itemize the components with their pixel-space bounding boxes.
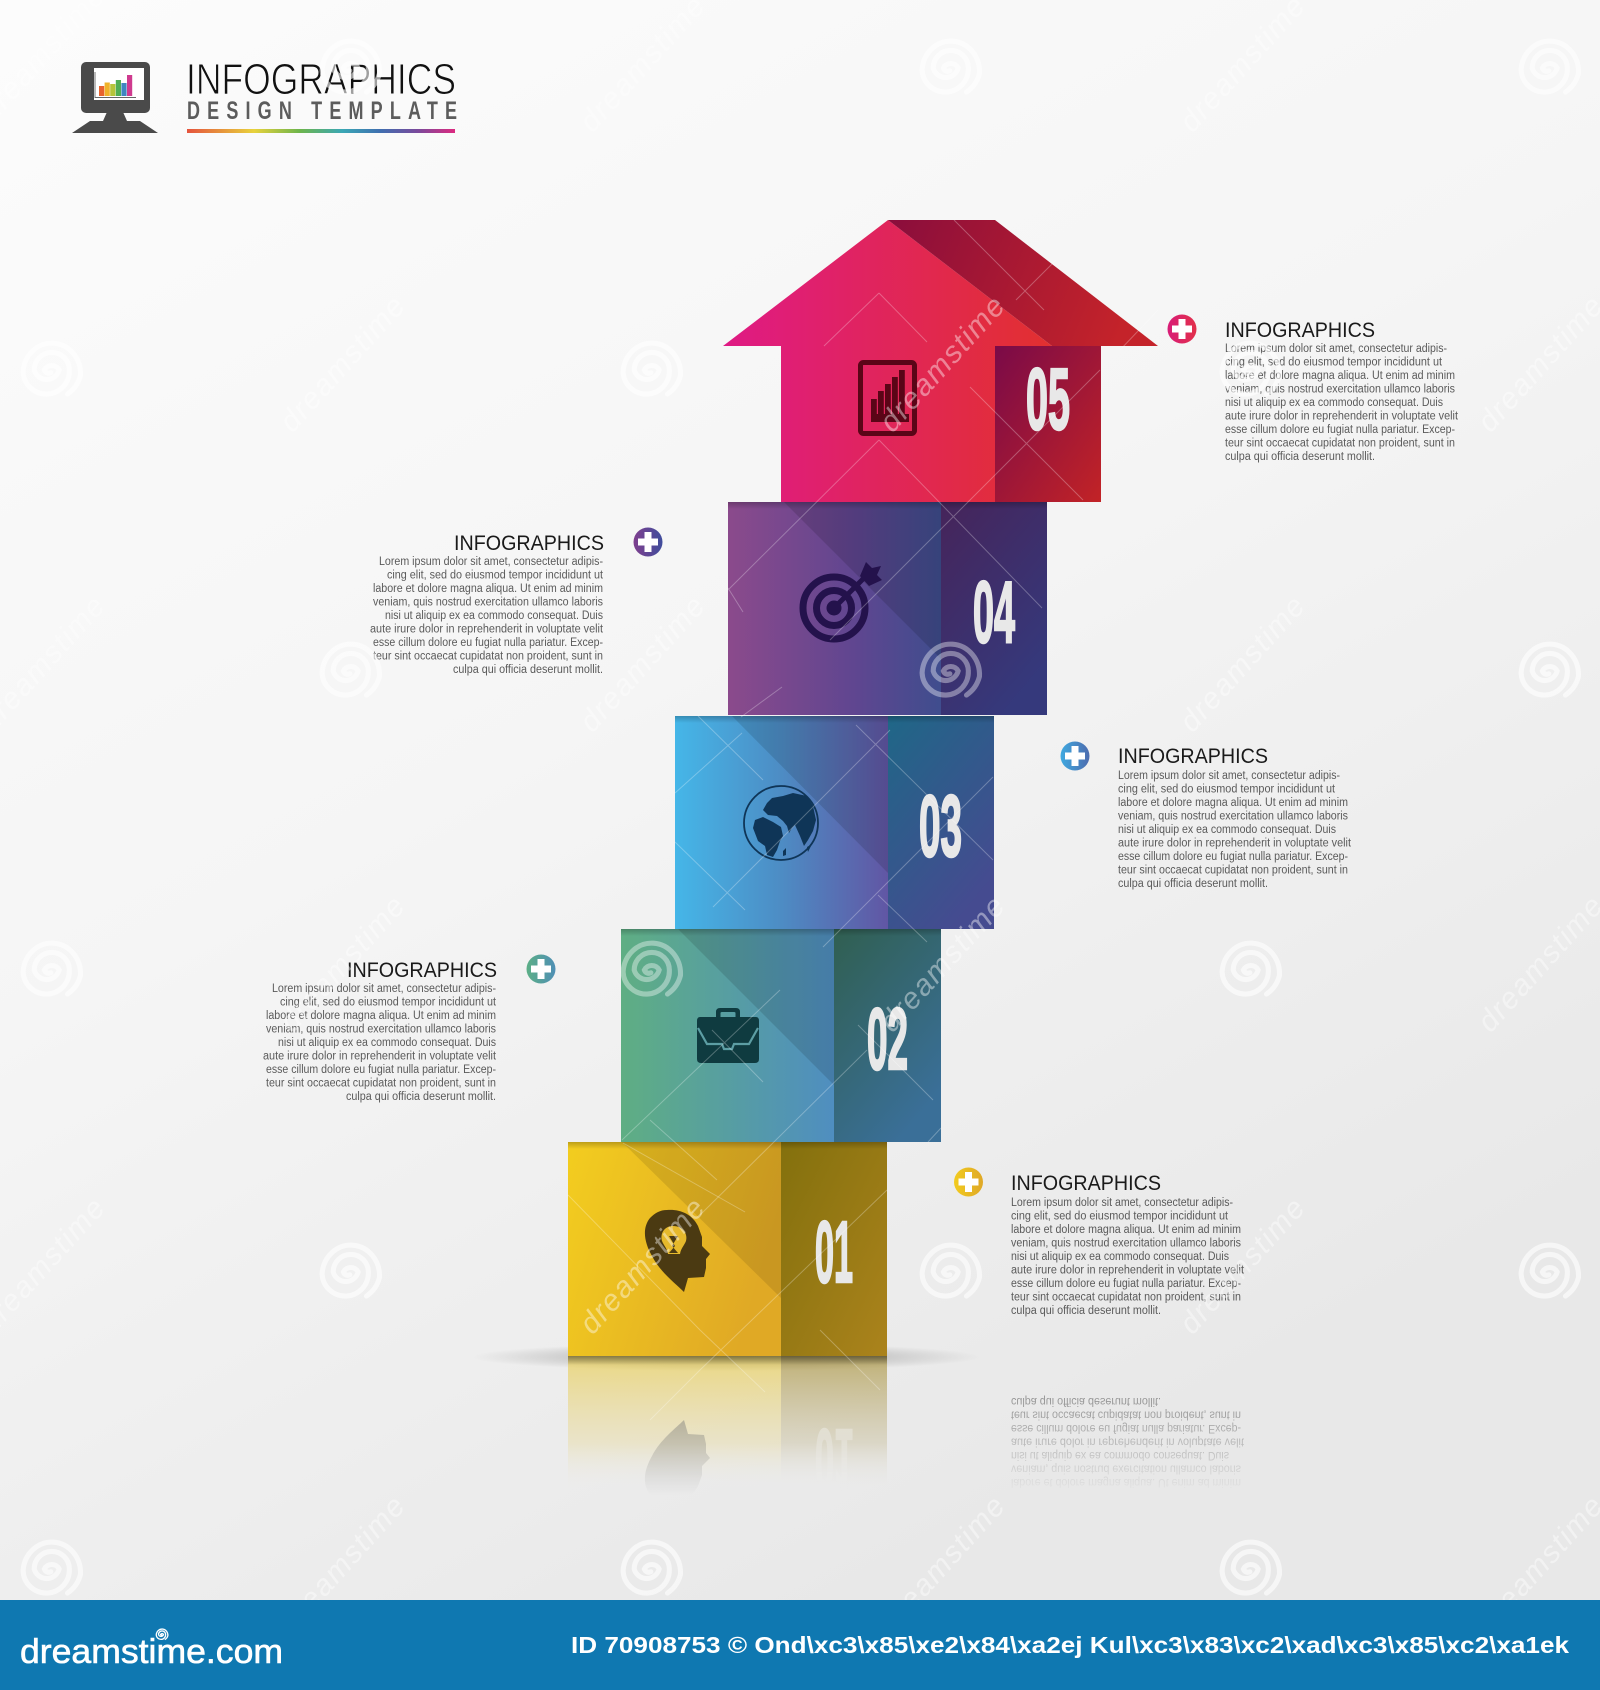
side panel [888,716,994,929]
body 02: labore et dolore magna aliqua. Ut enim ad minim [266,1010,496,1022]
watermark layer: dreamstime [1173,1191,1313,1340]
icon: plus badge 05 [1168,314,1196,344]
diagonal shadow [784,502,941,659]
icon: plus badge 01 [954,1168,983,1196]
watermark layer: dreamstime [573,589,713,738]
step 01: yellow box: 01 [815,1204,853,1301]
body 02: teur sint occaecat cupidatat non proident, sunt in [266,1078,496,1090]
icon: plus badge 02 [526,954,556,984]
header logo [72,55,457,133]
body 05 [1225,343,1459,463]
text block 04 [370,528,662,676]
body 04: Lorem ipsum dolor sit amet, consectetur adipis- [379,556,603,568]
body 01: cing elit, sed do eiusmod tempor incididunt ut [1011,1210,1229,1222]
heading 02: INFOGRAPHICS [347,959,497,982]
reflection of step 01 [498,1348,1244,1486]
reflected text: veniam, quis nostrud exercitation ullamco laboris [1011,1462,1241,1474]
body 01: teur sint occaecat cupidatat non proident, sunt in [1011,1292,1241,1304]
body 03: aute irure dolor in reprehenderit in voluptate velit [1118,838,1352,850]
reflected text: nisi ut aliquip ex ea commodo consequat. Duis [1011,1449,1229,1461]
step 03: blue box: 03 [919,778,962,875]
reflected text: labore et dolore magna aliqua. Ut enim ad minim [1011,1476,1241,1488]
body 01: Lorem ipsum dolor sit amet, consectetur adipis- [1011,1197,1233,1209]
body 05: culpa qui officia deserunt mollit. [1225,451,1375,463]
body 04: nisi ut aliquip ex ea commodo consequat. Duis [385,610,603,622]
watermark layer: dreamstime [873,889,1013,1038]
footer logo: dreamstime.com [20,1633,283,1671]
heading 04: INFOGRAPHICS [454,532,604,555]
body 04 [370,556,604,676]
body 01: veniam, quis nostrud exercitation ullamco laboris [1011,1238,1241,1250]
footer bar [0,1600,1600,1690]
step 05: pink arrow house: 05 [1026,351,1070,448]
body 04: culpa qui officia deserunt mollit. [453,664,603,676]
step 05: pink arrow house [723,220,1158,502]
body 04: cing elit, sed do eiusmod tempor incididunt ut [387,570,604,582]
watermark layer: dreamstime [273,1489,413,1638]
step 04: purple box [728,502,1047,715]
body 02: esse cillum dolore eu fugiat nulla pariatur. Excep- [266,1064,496,1076]
body 05: veniam, quis nostrud exercitation ullamco laboris [1225,384,1455,396]
watermark layer: dreamstime [273,889,413,1038]
body 05: Lorem ipsum dolor sit amet, consectetur adipis- [1225,343,1447,355]
diagonal shadow [732,716,888,873]
body 01: labore et dolore magna aliqua. Ut enim ad minim [1011,1224,1241,1236]
body 03: Lorem ipsum dolor sit amet, consectetur adipis- [1118,770,1340,782]
watermark layer: dreamstime [1173,589,1313,738]
body 02: aute irure dolor in reprehenderit in voluptate velit [263,1050,497,1062]
body 04: veniam, quis nostrud exercitation ullamco laboris [373,596,603,608]
watermark layer: dreamstime [573,1191,713,1340]
body 03: labore et dolore magna aliqua. Ut enim ad minim [1118,797,1348,809]
icon: globe [744,786,818,860]
body 04: aute irure dolor in reprehenderit in voluptate velit [370,624,604,636]
text block 01 [954,1168,1245,1317]
step 02: green box [621,929,941,1142]
body 05: teur sint occaecat cupidatat non proident, sunt in [1225,438,1455,450]
side panel [941,502,1047,715]
icon: tablet with rising bars [860,362,914,434]
body 02: Lorem ipsum dolor sit amet, consectetur adipis- [272,983,496,995]
heading 01: INFOGRAPHICS [1011,1172,1161,1195]
body 03: esse cillum dolore eu fugiat nulla pariatur. Excep- [1118,851,1348,863]
reflected icon and number [645,1420,852,1484]
icon: briefcase [697,1008,759,1063]
step 01: yellow box [568,1142,887,1356]
body 04: teur sint occaecat cupidatat non proident, sunt in [373,650,603,662]
body 02: nisi ut aliquip ex ea commodo consequat. Duis [278,1037,496,1049]
body 02: culpa qui officia deserunt mollit. [346,1091,496,1103]
body 03: culpa qui officia deserunt mollit. [1118,878,1268,890]
diagonal shadow [622,1142,781,1298]
heading 05: INFOGRAPHICS [1225,319,1375,342]
icon: head with light bulb [645,1210,710,1292]
body 02 [263,983,497,1103]
body 03: nisi ut aliquip ex ea commodo consequat. Duis [1118,824,1336,836]
reflected text [1011,1395,1245,1488]
body 01: culpa qui officia deserunt mollit. [1011,1305,1161,1317]
side panel [834,929,941,1142]
body 05: labore et dolore magna aliqua. Ut enim ad minim [1225,370,1455,382]
reflected text: esse cillum dolore eu fugiat nulla pariatur. Excep- [1011,1422,1241,1434]
step 04: purple box: 04 [973,564,1015,661]
body 01: nisi ut aliquip ex ea commodo consequat. Duis [1011,1251,1229,1263]
side panel [781,1142,887,1356]
step 03: blue box [675,716,994,929]
watermark layer: dreamstime [273,289,413,438]
subtitle: DESIGN TEMPLATE [187,96,457,125]
text block 05 [1168,314,1459,463]
body 05: esse cillum dolore eu fugiat nulla pariatur. Excep- [1225,424,1455,436]
reflected text: culpa qui officia deserunt mollit. [1011,1395,1161,1407]
body 05: nisi ut aliquip ex ea commodo consequat. Duis [1225,397,1443,409]
body 03: veniam, quis nostrud exercitation ullamco laboris [1118,810,1348,822]
roof shadow [888,220,1158,346]
body 05: cing elit, sed do eiusmod tempor incididunt ut [1225,356,1443,368]
body 04: labore et dolore magna aliqua. Ut enim ad minim [373,583,603,595]
title: INFOGRAPHICS [186,55,456,104]
diagonal shadow [678,929,834,1085]
body 03 [1118,770,1352,890]
side panel [995,346,1101,502]
ground shadow [472,1343,982,1371]
watermark layer: dreamstime [873,289,1013,438]
icon: target with arrow [803,562,882,639]
rainbow underline [187,129,455,133]
body 04: esse cillum dolore eu fugiat nulla pariatur. Excep- [373,637,603,649]
body 02: veniam, quis nostrud exercitation ullamco laboris [266,1024,496,1036]
icon: computer monitor with bar chart [72,62,158,133]
body 01 [1011,1197,1245,1317]
step 02: green box: 02 [867,991,908,1088]
body 03: teur sint occaecat cupidatat non proident, sunt in [1118,864,1348,876]
body 01: aute irure dolor in reprehenderit in voluptate velit [1011,1264,1245,1276]
body 05: aute irure dolor in reprehenderit in voluptate velit [1225,410,1459,422]
footer credit: ID 70908753 © Ond\xc3\x85\xe2\x84\xa2ej Kul\xc3\x83\xc2\xad\xc3\x85\xc2\xa1ek [571,1632,1569,1658]
reflected text: teur sint occaecat cupidatat non proident, sunt in [1011,1408,1241,1420]
heading 03: INFOGRAPHICS [1118,745,1268,768]
text block 03 [1060,742,1352,890]
body 03: cing elit, sed do eiusmod tempor incididunt ut [1118,784,1336,796]
body 02: cing elit, sed do eiusmod tempor incididunt ut [280,996,497,1008]
icon: plus badge 04 [634,528,662,556]
body 01: esse cillum dolore eu fugiat nulla pariatur. Excep- [1011,1278,1241,1290]
icon: plus badge 03 [1060,742,1090,770]
watermark layer: dreamstime [873,1489,1013,1638]
reflected text: aute irure dolor in reprehenderit in voluptate velit [1011,1436,1245,1448]
reflection of step 01: 01 [815,1411,853,1508]
text block 02 [263,954,556,1103]
